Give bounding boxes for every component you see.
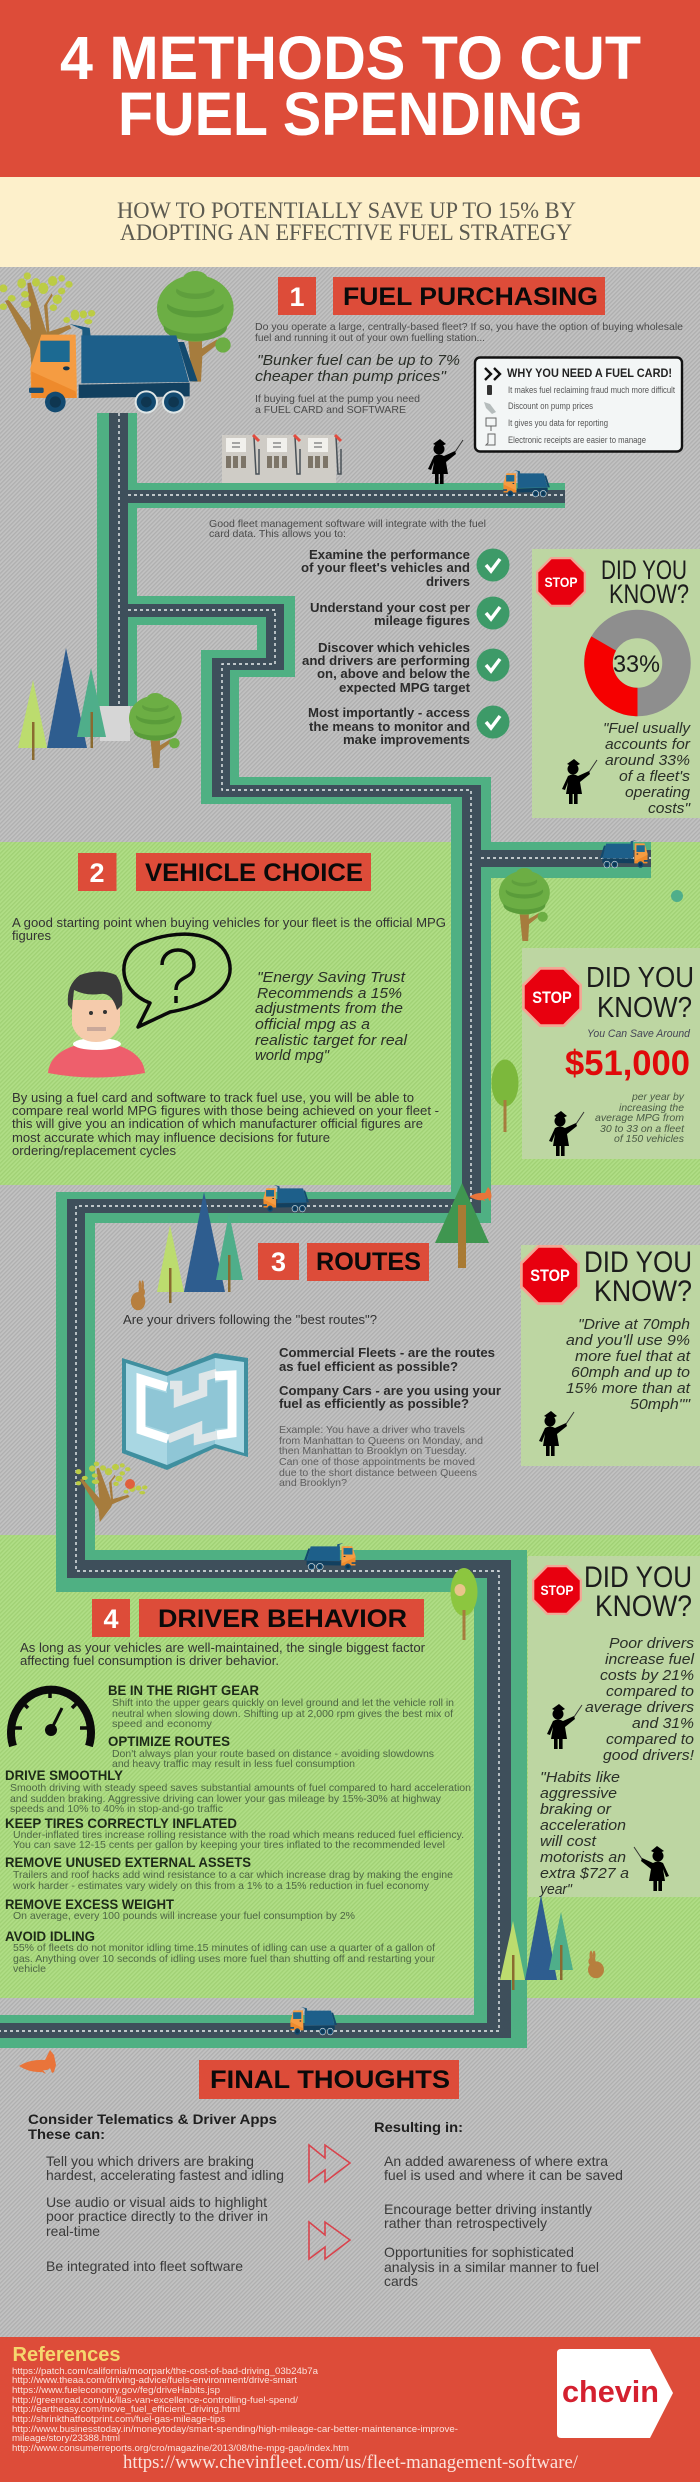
routes bold questions: Commercial Fleets - are the routes: [279, 1345, 495, 1360]
quote: "Drive at 70mph: [578, 1316, 690, 1333]
quote: poor drivers: costs by 21%: [600, 1667, 694, 1684]
fuel card note: [255, 393, 420, 416]
quote: 50mph"": [630, 1396, 691, 1413]
checklist: and drivers are performing: [302, 653, 470, 668]
icon: speedometer: [11, 1688, 91, 1746]
routes bold questions: Company Cars - are you using your: [279, 1383, 501, 1398]
icon: teacher figure: [428, 439, 463, 484]
panel: did you know 1: [532, 549, 700, 818]
section 1 intro text: [255, 321, 683, 344]
bunker fuel quote: cheaper than pump prices": [255, 368, 447, 385]
donut chart 33%: 33%: [613, 651, 660, 678]
references list: https://www.fueleconomy.gov/feg/driveHabits.jsp: [12, 2385, 220, 2396]
routes example: Example: You have a driver who travels: [279, 1424, 465, 1436]
routes example: from Manhattan to Queens on Monday, and: [279, 1435, 483, 1447]
section 3 heading: ROUTES: [316, 1248, 421, 1276]
section 2 heading: VEHICLE CHOICE: [145, 859, 363, 887]
software text: [209, 518, 486, 540]
big truck and trees: [0, 271, 234, 414]
telematics column: [28, 2111, 284, 2274]
section 2 intro: A good starting point when buying vehicles for your fleet is the official MPG: [12, 915, 446, 930]
truck on road 4: [304, 1543, 356, 1570]
routes example: [279, 1424, 483, 1489]
quote: more fuel that at: [575, 1348, 691, 1365]
quote: poor drivers: Poor drivers: [609, 1635, 695, 1652]
quote: [603, 720, 692, 817]
routes example: due to the short distance between Queens: [279, 1467, 477, 1479]
tip: excess weight: On average, every 100 pounds will increase your fuel consumption by 2%: [13, 1910, 355, 1922]
quote: poor drivers: [585, 1635, 695, 1764]
checklist: Examine the performance: [309, 547, 470, 562]
tip: drive smoothly: DRIVE SMOOTHLY: [5, 1767, 124, 1783]
energy saving quote: realistic target for real: [255, 1032, 408, 1049]
references list: http://shrinkthatfootprint.com/fuel-gas-mileage-tips: [12, 2414, 225, 2425]
panel: did you know 3: [520, 1245, 700, 1466]
references list: http://greenroad.com/uk/llas-van-excellence-controlling-fuel-spend/: [12, 2395, 298, 2406]
tip: drive smoothly: speeds and 10% to 40% in stop-and-go traffic: [10, 1803, 223, 1815]
donut chart 33%: [598, 624, 676, 702]
section 2 paragraph: compare real world MPG figures with those being achieved on your fleet -: [12, 1103, 439, 1118]
telematics column: These can:: [28, 2126, 105, 2142]
references list: http://eartheasy.com/move_fuel_efficient_driving.html: [12, 2404, 240, 2415]
section 3 heading: [258, 1243, 429, 1281]
tip: optimize routes: Don't always plan your route based on distance - avoiding slowdowns: [112, 1748, 434, 1760]
routes example: then Manhattan to Brooklyn on Tuesday.: [279, 1445, 467, 1457]
quote: operating: [625, 784, 691, 801]
references list: http://www.theaa.com/driving-advice/fuels-environment/drive-smart: [12, 2375, 297, 2386]
tip: optimize routes: and heavy traffic may result in less fuel consumption: [112, 1758, 355, 1770]
tip: right gear: BE IN THE RIGHT GEAR: [108, 1682, 259, 1698]
icon: stop sign: STOP: [544, 574, 578, 590]
section 4 intro: affecting fuel consumption is driver behavior.: [20, 1653, 279, 1668]
tip: drive smoothly: [5, 1767, 471, 1815]
software text: Good fleet management software will integrate with the fuel: [209, 518, 486, 530]
final thoughts heading: FINAL THOUGHTS: [210, 2066, 450, 2094]
panel: did you know 2: [522, 948, 700, 1159]
tip: drive smoothly: Smooth driving with steady speed saves substantial amounts of fuel compared to hard acceleration: [10, 1782, 471, 1794]
icon: check 4: [476, 706, 510, 738]
icon: stop sign: [536, 557, 586, 607]
section 2 paragraph: By using a fuel card and software to track fuel use, you will be able to: [12, 1090, 414, 1105]
energy saving quote: world mpg": [255, 1047, 330, 1064]
section 1 heading: FUEL PURCHASING: [343, 283, 598, 311]
tip: external assets: Trailers and roof hacks add wind resistance to a car which increase drag by making the engine: [13, 1869, 453, 1881]
tip: tires: You can save 12-15 cents per gallon by keeping your tires inflated to the recommended level: [13, 1839, 445, 1851]
pines and rabbit section 4: [500, 1895, 604, 1990]
section 2 intro: figures: [12, 928, 51, 943]
quote: poor drivers: compared to: [606, 1731, 694, 1748]
results column: Opportunities for sophisticated: [384, 2244, 574, 2260]
energy saving quote: "Energy Saving Trust: [257, 969, 406, 986]
icon: stop sign: STOP: [530, 1266, 570, 1285]
quote: 60mph and up to: [571, 1364, 690, 1381]
subtitle band: [0, 177, 700, 267]
checklist: drivers: [426, 574, 470, 589]
results column: analysis in a similar manner to fuel: [384, 2259, 599, 2275]
panel: why you need a fuel card: Discount on pump prices: [508, 401, 593, 411]
icon: small truck on road 1: [503, 470, 550, 497]
panel: why you need a fuel card: Electronic receipts are easier to manage: [508, 435, 646, 445]
icon: check 3: [476, 648, 510, 682]
checklist: Most importantly - access: [308, 705, 470, 720]
section 4 intro: As long as your vehicles are well-maintained, the single biggest factor: [20, 1640, 426, 1655]
tip: right gear: Shift into the upper gears quickly on level ground and let the vehicle roll in: [112, 1697, 454, 1709]
checklist: expected MPG target: [339, 680, 471, 695]
tip: excess weight: [5, 1896, 355, 1922]
checklist: on, above and below the: [317, 666, 470, 681]
section 4 intro: [20, 1640, 426, 1668]
quote: of a fleet's: [619, 768, 691, 785]
tip: idling: 55% of fleets do not monitor idling time.15 minutes of idling can use a quarter of a gallon of: [13, 1942, 435, 1954]
results column: Encourage better driving instantly: [384, 2201, 592, 2217]
checklist: Understand your cost per: [310, 600, 470, 615]
icon: teacher: [539, 1411, 574, 1456]
section 2 heading: [78, 853, 371, 891]
panel: did you know 4: [528, 1556, 700, 1898]
icon: man portrait: [48, 972, 145, 1078]
title banner: [0, 0, 700, 177]
road decorations section 3: [131, 1183, 492, 1310]
tip: drive smoothly: and sudden braking. Aggressive driving can lower your gas mileage by 15%-30% at highway: [10, 1793, 442, 1805]
savings note: of 150 vehicles: [614, 1133, 685, 1145]
energy saving quote: [255, 969, 408, 1064]
icon: folded map: [122, 1353, 248, 1470]
tip: external assets: [5, 1854, 453, 1892]
references list: https://patch.com/california/moorpark/the-cost-of-bad-driving_03b24b7a: [12, 2366, 319, 2377]
quote: habits: [539, 1769, 629, 1898]
results column: cards: [384, 2273, 418, 2289]
section 2 paragraph: this will give you an indication of which manufacturer official figures are: [12, 1116, 423, 1131]
quote: poor drivers: increase fuel: [605, 1651, 695, 1668]
fuel card note: a FUEL CARD and SOFTWARE: [255, 404, 406, 416]
footer: [0, 2337, 700, 2482]
icon: fuel pumps: [222, 435, 341, 483]
routes bold questions: [279, 1345, 501, 1411]
panel: why you need a fuel card: It gives you data for reporting: [508, 418, 608, 428]
energy saving quote: Recommends a 15%: [257, 985, 402, 1002]
chevin logo: [557, 2349, 673, 2438]
title banner: 4 METHODS TO CUT: [60, 24, 641, 92]
quote: habits: aggressive: [540, 1785, 617, 1802]
energy saving quote: official mpg as a: [255, 1016, 370, 1033]
references list: mileage/story/23388.html: [12, 2433, 120, 2444]
icon: teacher: [549, 1111, 584, 1156]
energy saving quote: adjustments from the: [255, 1000, 403, 1017]
tips list: [5, 1682, 471, 1975]
tip: idling: gas. Anything over 10 seconds of idling uses more fuel than shutting off and restarting your: [13, 1953, 435, 1965]
section 4 heading: [92, 1599, 424, 1637]
pine trees and round tree by road 1: [18, 648, 182, 768]
icon: teacher mirrored: [634, 1846, 669, 1891]
tip: idling: vehicle: [13, 1963, 46, 1975]
panel: did you know 2: You Can Save Around: [587, 1028, 691, 1040]
references heading: References: [12, 2344, 120, 2366]
section 2 intro: [12, 915, 446, 943]
truck on branch road: [600, 840, 648, 868]
section 4 heading: DRIVER BEHAVIOR: [158, 1605, 407, 1633]
arrow: double chevron 1: [309, 2145, 350, 2182]
section 2 heading: 2: [89, 858, 105, 888]
checklist: [301, 547, 510, 747]
tip: tires: [5, 1815, 464, 1851]
icon: presentation board: [486, 418, 496, 431]
software text: card data. This allows you to:: [209, 528, 346, 540]
tip: excess weight: REMOVE EXCESS WEIGHT: [5, 1896, 174, 1912]
quote: poor drivers: and 31%: [632, 1715, 694, 1732]
arrow: double chevron 2: [309, 2222, 350, 2259]
icon: teacher: [547, 1704, 582, 1749]
truck on bottom road: [290, 2007, 337, 2035]
quote: habits: acceleration: [540, 1817, 626, 1834]
tip: idling: AVOID IDLING: [5, 1928, 95, 1944]
results column: fuel is used and where it can be saved: [384, 2167, 623, 2183]
section 2 paragraph: ordering/replacement cycles: [12, 1143, 177, 1158]
panel: why you need a fuel card: It makes fuel reclaiming fraud much more difficult: [508, 385, 675, 395]
telematics column: real-time: [46, 2223, 100, 2239]
icon: stop sign: [520, 1245, 580, 1305]
telematics column: poor practice directly to the driver in: [46, 2208, 268, 2224]
icon: check 1: [476, 548, 510, 582]
tree and dot section 2: [492, 868, 683, 1132]
quote: accounts for: [605, 736, 691, 753]
quote: [566, 1316, 691, 1413]
quote: "Fuel usually: [603, 720, 692, 737]
results column: [374, 2119, 623, 2289]
subtitle band: ADOPTING AN EFFECTIVE FUEL STRATEGY: [120, 220, 572, 245]
telematics column: Be integrated into fleet software: [46, 2258, 243, 2274]
section 1 intro text: Do you operate a large, centrally-based fleet? If so, you have the option of buying wholesale: [255, 321, 683, 333]
tip: right gear: [108, 1682, 454, 1730]
references list: http://www.consumerreports.org/cro/magazine/2013/08/the-mpg-gap/index.htm: [12, 2443, 349, 2454]
telematics column: Use audio or visual aids to highlight: [46, 2194, 267, 2210]
final thoughts heading: [199, 2060, 459, 2099]
quote: poor drivers: compared to: [606, 1683, 694, 1700]
title banner: FUEL SPENDING: [118, 80, 583, 148]
checklist: make improvements: [343, 732, 470, 747]
lollipop tree with owl: [450, 1568, 478, 1640]
panel: did you know 2: $51,000: [565, 1044, 690, 1083]
results column: Resulting in:: [374, 2119, 463, 2135]
icon: stop sign: STOP: [540, 1582, 574, 1598]
savings note: [595, 1091, 685, 1145]
bunker fuel quote: [255, 352, 460, 385]
subtitle band: HOW TO POTENTIALLY SAVE UP TO 15% BY: [117, 198, 576, 223]
quote: habits: motorists an: [540, 1849, 626, 1866]
tip: tires: Under-inflated tires increase rolling resistance with the road which means reduced fuel efficiency.: [13, 1829, 464, 1841]
tip: tires: KEEP TIRES CORRECTLY INFLATED: [5, 1815, 237, 1831]
website url: https://www.chevinfleet.com/us/fleet-management-software/: [123, 2452, 579, 2473]
icon: stop sign: [522, 967, 582, 1027]
routes example: and Brooklyn?: [279, 1477, 347, 1489]
checklist: of your fleet's vehicles and: [301, 560, 470, 575]
savings note: average MPG from: [595, 1112, 684, 1124]
routes bold questions: fuel as efficiently as possible?: [279, 1396, 469, 1411]
section 3 heading: 3: [271, 1247, 286, 1277]
truck on road 3: [263, 1185, 309, 1212]
quote: habits: will cost: [540, 1833, 597, 1850]
icon: fuel pump small: [487, 385, 492, 395]
section 1 heading: [278, 277, 605, 315]
quote: poor drivers: good drivers!: [603, 1747, 695, 1764]
telematics column: Consider Telematics & Driver Apps: [28, 2111, 277, 2127]
quote: 15% more than at: [566, 1380, 691, 1397]
results column: An added awareness of where extra: [384, 2153, 608, 2169]
checklist: the means to monitor and: [309, 719, 470, 734]
road network: [0, 413, 651, 2048]
bunker fuel quote: "Bunker fuel can be up to 7%: [257, 352, 460, 369]
savings note: 30 to 33 on a fleet: [600, 1123, 685, 1135]
icon: fox: [19, 2050, 56, 2074]
icon: check 2: [476, 596, 510, 630]
autumn tree: [76, 1462, 148, 1522]
tip: optimize routes: [108, 1733, 434, 1770]
icon: stop sign: [532, 1565, 582, 1615]
tip: external assets: work harder - estimates vary widely on this from a 1% to a 15% reduction in fuel economy: [12, 1880, 430, 1892]
tip: external assets: REMOVE UNUSED EXTERNAL ASSETS: [5, 1854, 251, 1870]
checklist: Discover which vehicles: [318, 640, 470, 655]
quote: and you'll use 9%: [566, 1332, 690, 1349]
panel: why you need a fuel card: [475, 358, 682, 452]
icon: tag: [484, 402, 496, 414]
telematics column: hardest, accelerating fastest and idling: [46, 2167, 284, 2183]
section 2 paragraph: most accurate which may influence decisions for future: [12, 1130, 330, 1145]
icon: teacher: [562, 759, 597, 804]
icon: stop sign: STOP: [532, 988, 572, 1007]
icon: chevrons: [485, 368, 500, 380]
best routes question: Are your drivers following the "best routes"?: [123, 1312, 377, 1327]
icon: speech bubble with question mark: [124, 934, 230, 1027]
savings note: increasing the: [619, 1102, 684, 1114]
chevin logo: chevin: [562, 2374, 659, 2409]
section 1 intro text: fuel and running it out of your own fuelling station...: [255, 332, 485, 344]
icon: receipt: [486, 434, 495, 445]
savings note: per year by: [631, 1091, 685, 1103]
quote: habits: extra $727 a: [540, 1865, 629, 1882]
quote: habits: braking or: [540, 1801, 612, 1818]
tip: right gear: speed and economy: [112, 1718, 213, 1730]
tip: optimize routes: OPTIMIZE ROUTES: [108, 1733, 230, 1749]
checklist: mileage figures: [374, 613, 470, 628]
section 4 heading: 4: [103, 1604, 119, 1634]
telematics column: Tell you which drivers are braking: [46, 2153, 254, 2169]
quote: poor drivers: average drivers: [585, 1699, 695, 1716]
icon: big truck: [29, 324, 198, 414]
tip: idling: [5, 1928, 435, 1975]
routes example: Can one of those appointments be moved: [279, 1456, 475, 1468]
quote: habits: "Habits like: [540, 1769, 620, 1786]
references list: [12, 2366, 458, 2454]
quote: around 33%: [605, 752, 690, 769]
section 2 paragraph: [12, 1090, 439, 1158]
routes bold questions: as fuel efficient as possible?: [279, 1359, 458, 1374]
fuel card note: If buying fuel at the pump you need: [255, 393, 420, 405]
quote: habits: year": [539, 1881, 573, 1898]
section 1 heading: 1: [289, 282, 305, 312]
results column: rather than retrospectively: [384, 2215, 547, 2231]
references list: http://www.businesstoday.in/moneytoday/smart-spending/high-mileage-car-better-maintenance-improve-: [12, 2424, 458, 2435]
quote: costs": [648, 800, 691, 817]
panel: why you need a fuel card: WHY YOU NEED A FUEL CARD!: [507, 368, 672, 380]
tip: right gear: neutral when slowing down. Shifting up at 2,000 rpm gives the best mix of: [112, 1708, 453, 1720]
